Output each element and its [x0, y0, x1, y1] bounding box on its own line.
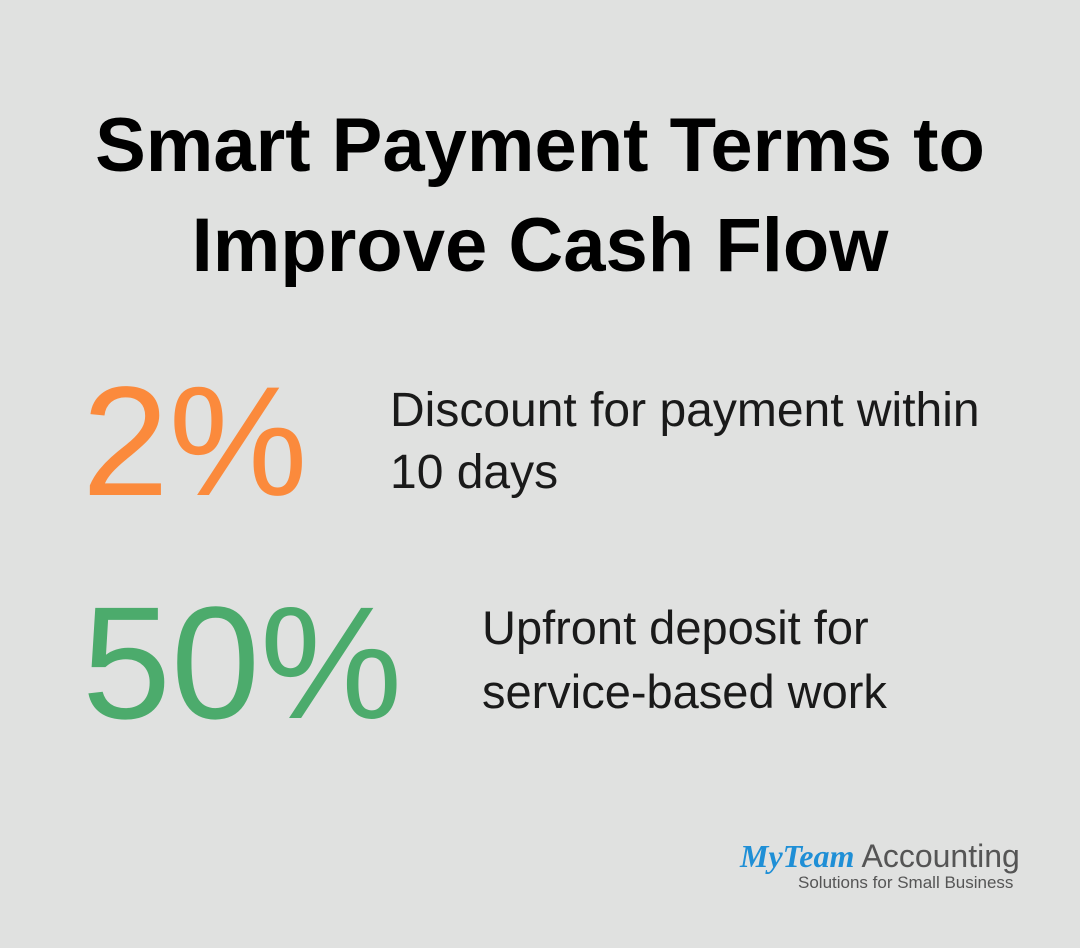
number 2%: 2%	[82, 355, 307, 529]
text: discount: 10 days	[390, 446, 558, 499]
logo	[740, 838, 1020, 892]
title: Smart Payment Terms to	[95, 103, 985, 188]
title	[95, 103, 985, 288]
number 50%: 50%	[82, 573, 402, 752]
text: discount	[390, 384, 980, 499]
title: Improve Cash Flow	[192, 203, 888, 288]
text: deposit: service-based work	[482, 665, 887, 718]
text: deposit: Upfront deposit for	[482, 601, 869, 654]
text: discount: Discount for payment within	[390, 384, 980, 437]
logo tagline: Solutions for Small Business	[798, 873, 1013, 892]
text: deposit	[482, 601, 887, 718]
logo wordmark: MyTeam Accounting	[740, 838, 1020, 874]
